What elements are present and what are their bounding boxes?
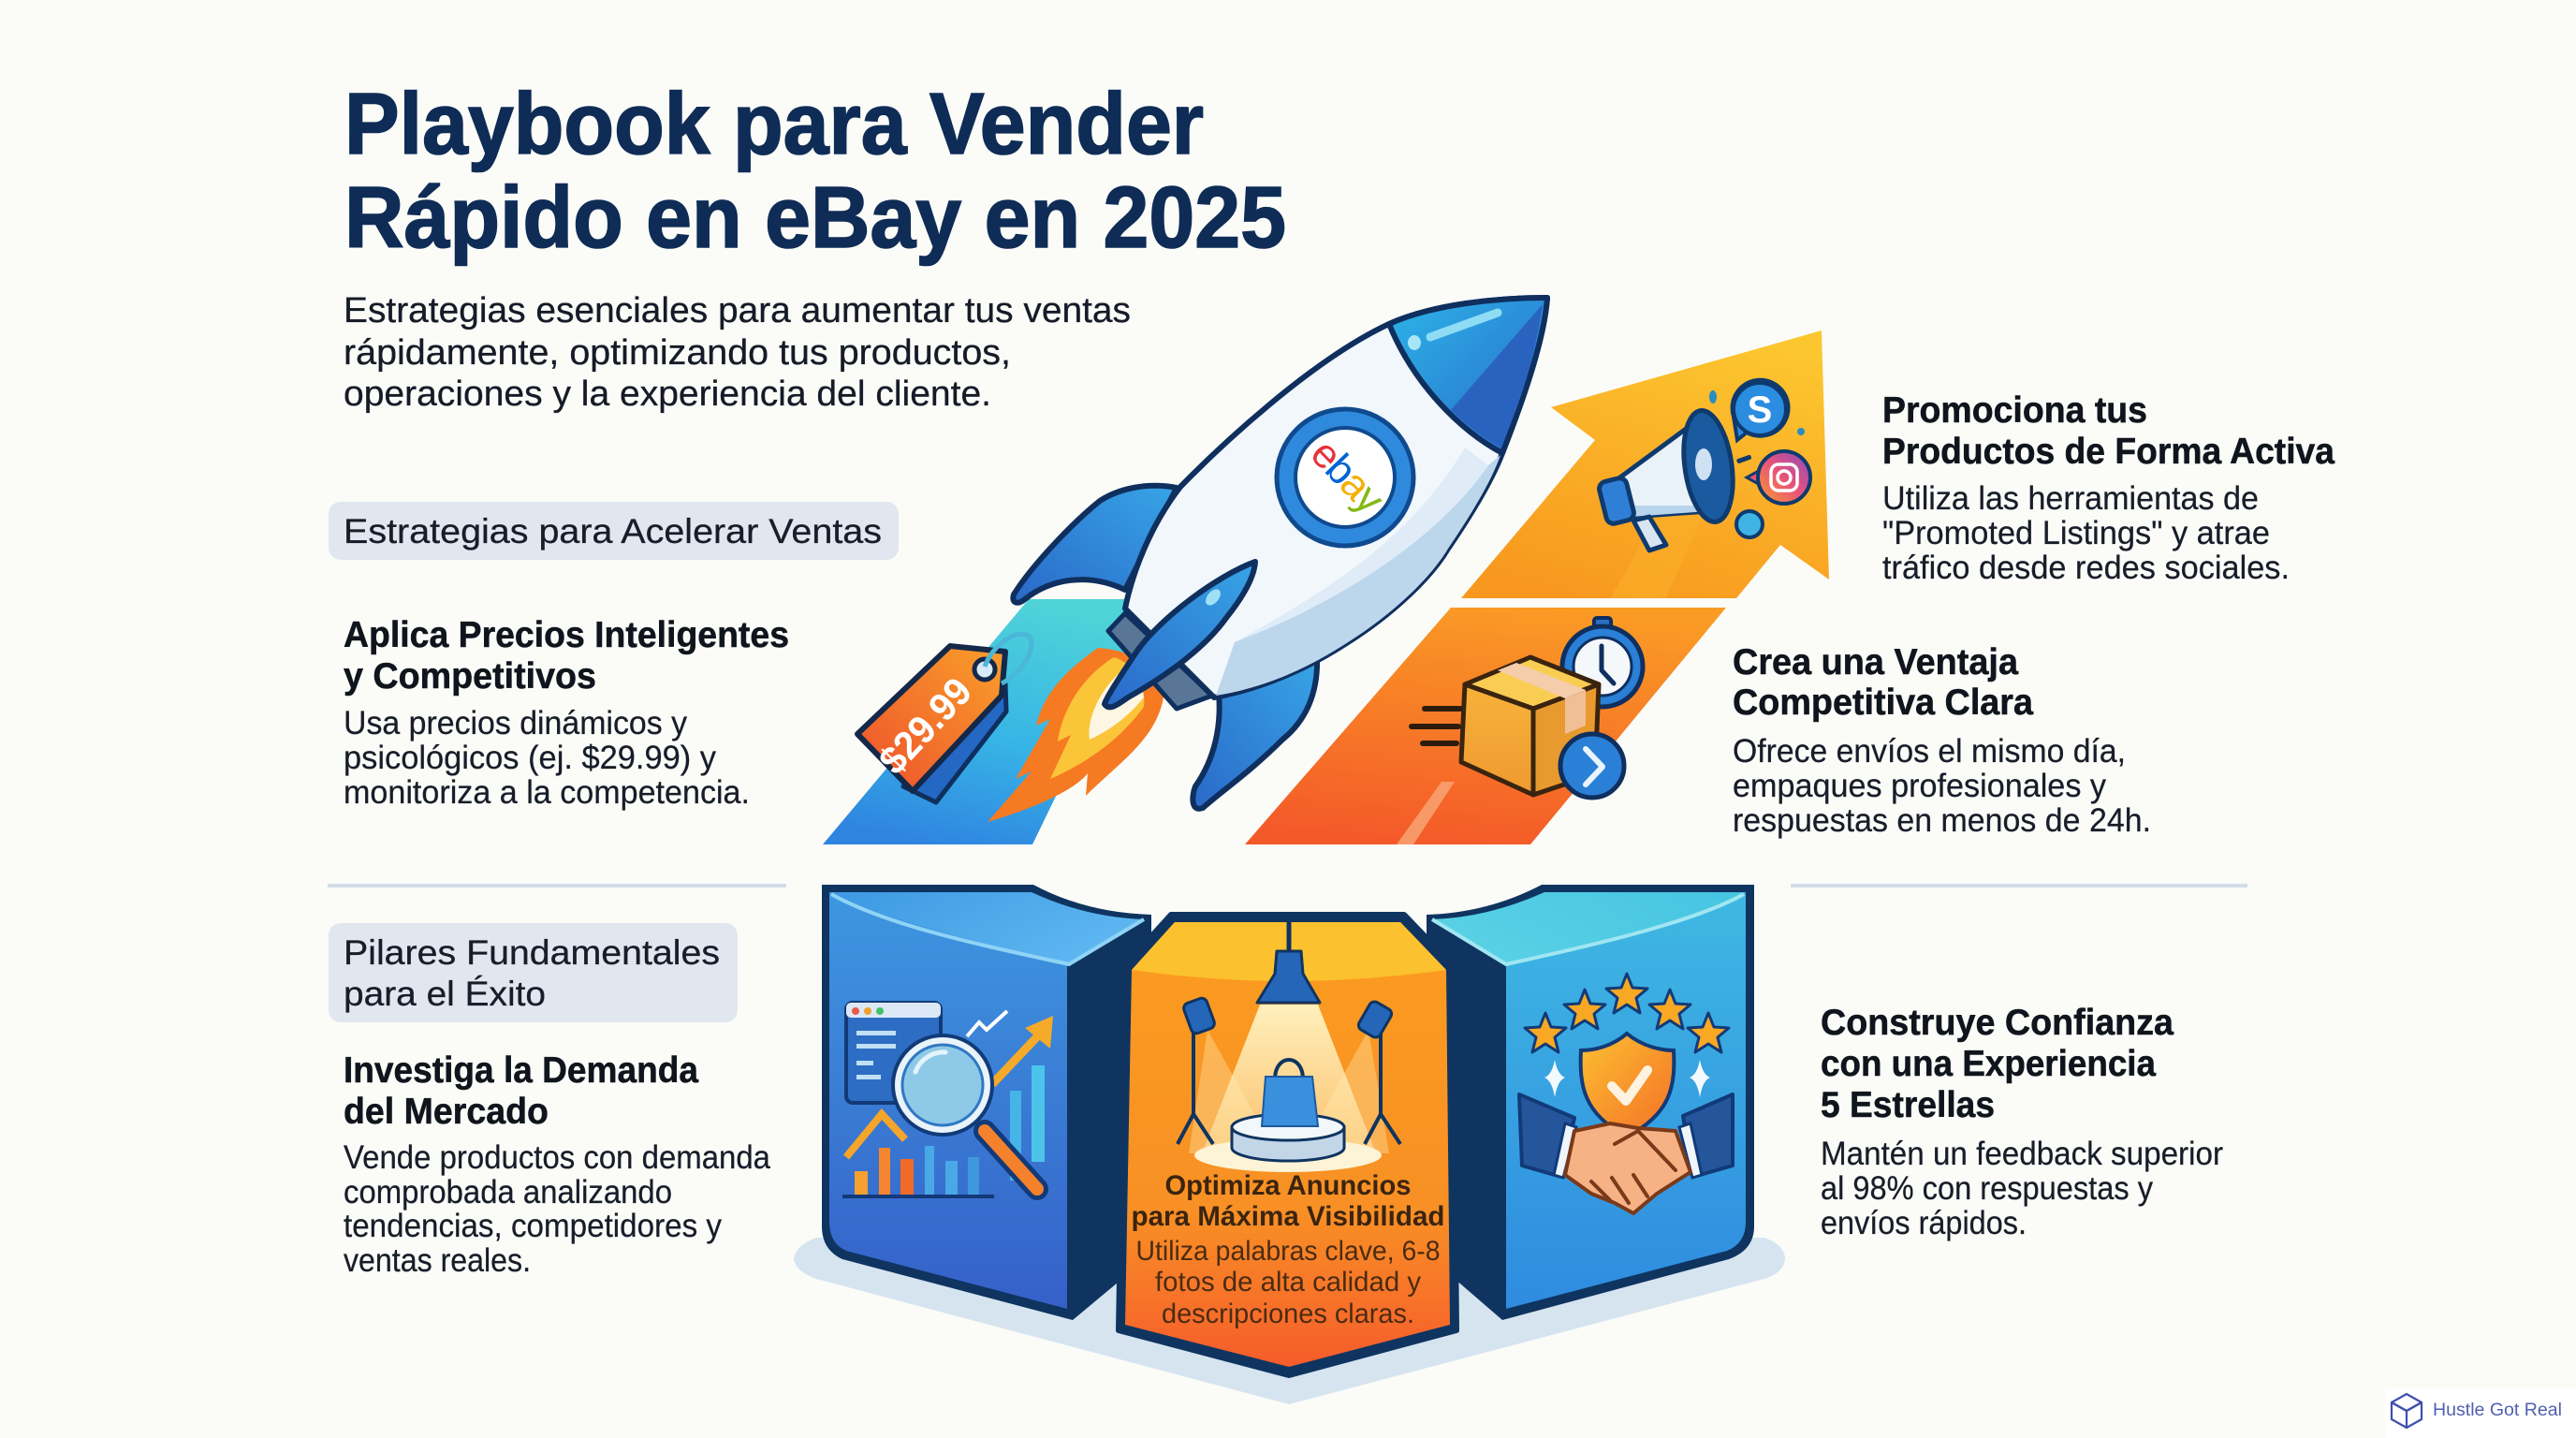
chart: trend line	[846, 1114, 905, 1157]
pillar text	[1131, 1170, 1445, 1329]
icon: display pedestal	[1232, 1114, 1344, 1161]
body: confianza: Mantén un feedback superior	[1821, 1136, 2223, 1172]
illustration: rocket launch	[823, 298, 1547, 844]
body: precios: psicológicos (ej. $29.99) y	[344, 740, 716, 776]
icon: small circle	[1736, 511, 1763, 537]
icon: hanging lamp	[1257, 922, 1320, 1003]
heading: precios: Aplica Precios Inteligentes	[344, 615, 789, 655]
watermark	[2385, 1388, 2576, 1438]
title	[344, 75, 1286, 266]
subtitle	[344, 291, 1131, 414]
rocket nozzle	[1108, 613, 1212, 709]
body: precios: Usa precios dinámicos y	[344, 705, 687, 741]
rocket body shading	[1216, 448, 1500, 696]
text block: demanda	[344, 1050, 771, 1279]
section label: pilares	[329, 923, 738, 1022]
icon: shopping bag	[1262, 1060, 1318, 1126]
body: promociona: tráfico desde redes sociales.	[1882, 550, 2290, 586]
illustration: orange up arrow with megaphone	[1461, 330, 1829, 598]
title: Playbook para Vender	[344, 75, 1204, 172]
icon: browser window	[846, 1003, 941, 1103]
chart: bars	[842, 1065, 1045, 1198]
rocket lower fin	[1193, 659, 1317, 809]
heading: demanda: Investiga la Demanda	[344, 1050, 698, 1091]
icon: five stars	[1525, 974, 1729, 1052]
body: ventaja: Ofrece envíos el mismo día,	[1733, 733, 2126, 770]
pedestal base	[794, 1238, 1785, 1404]
section label: estrategias: Estrategias para Acelerar Ventas	[344, 512, 882, 550]
pillar text: Optimiza Anuncios	[1164, 1170, 1412, 1201]
heading: demanda: del Mercado	[344, 1092, 549, 1132]
icon: instagram bubble	[1747, 451, 1810, 504]
porthole with eBay logo	[1277, 409, 1413, 546]
rocket upper fin	[1013, 486, 1177, 603]
icon: price tag	[857, 634, 1032, 802]
body: promociona: "Promoted Listings" y atrae	[1882, 515, 2270, 551]
text block: ventaja	[1733, 642, 2151, 839]
icon: megaphone	[1598, 407, 1739, 550]
body: promociona	[1882, 480, 2290, 586]
flame	[988, 648, 1164, 822]
rocket nose cone	[1389, 298, 1547, 453]
watermark: Hustle Got Real	[2433, 1401, 2562, 1420]
icon: shield	[1581, 1034, 1674, 1137]
body: demanda: comprobada analizando	[344, 1174, 672, 1211]
icon: spotlight right	[1356, 1000, 1400, 1144]
heading: precios: y Competitivos	[344, 656, 596, 697]
section label: pilares: Pilares Fundamentales	[344, 933, 720, 972]
body: precios	[344, 705, 750, 811]
body: promociona: Utiliza las herramientas de	[1882, 480, 2259, 517]
heading: demanda	[344, 1050, 698, 1132]
pillar text: para Máxima Visibilidad	[1131, 1201, 1445, 1232]
icon: speed lines	[1412, 709, 1460, 743]
heading: confianza	[1821, 1003, 2174, 1125]
icon: box	[1461, 657, 1599, 795]
pillar: trust and five stars	[1427, 885, 1754, 1320]
body: confianza	[1821, 1136, 2223, 1241]
text block: precios	[344, 615, 789, 811]
icon: spotlight left	[1178, 997, 1216, 1144]
light beams	[1189, 1005, 1389, 1172]
subtitle: rápidamente, optimizando tus productos,	[344, 333, 1011, 373]
porthole with eBay logo: ebay	[1302, 431, 1393, 522]
body: precios: monitoriza a la competencia.	[344, 774, 750, 811]
icon: up arrow	[967, 1011, 1053, 1084]
heading: ventaja: Competitiva Clara	[1733, 682, 2033, 723]
icon: stopwatch	[1562, 618, 1643, 707]
icon: handshake	[1519, 1094, 1733, 1213]
section label: estrategias	[329, 502, 899, 560]
rocket body	[1125, 298, 1547, 697]
icon: sound dots	[1709, 390, 1805, 464]
icon: cube logo	[2392, 1394, 2422, 1428]
section label: pilares: para el Éxito	[344, 975, 546, 1013]
text block: promociona	[1882, 390, 2334, 586]
body: ventaja: empaques profesionales y	[1733, 768, 2106, 804]
icon: chat bubble S: S	[1748, 389, 1772, 431]
rocket centre fin	[1105, 562, 1255, 707]
body: demanda: ventas reales.	[344, 1242, 531, 1279]
body: ventaja	[1733, 733, 2151, 839]
text block: confianza	[1821, 1003, 2223, 1241]
heading: precios	[344, 615, 789, 697]
illustration: orange parallelogram with delivery box	[1245, 608, 1726, 844]
pillar: optimize listings	[1119, 915, 1456, 1375]
body: ventaja: respuestas en menos de 24h.	[1733, 802, 2151, 839]
pillar text: descripciones claras.	[1162, 1299, 1414, 1329]
subtitle: Estrategias esenciales para aumentar tus ventas	[344, 291, 1131, 330]
heading: confianza: Construye Confianza	[1821, 1003, 2174, 1043]
icon: chat bubble S	[1733, 380, 1789, 440]
title: Rápido en eBay en 2025	[344, 169, 1286, 266]
pillar text: fotos de alta calidad y	[1155, 1267, 1421, 1298]
body: confianza: envíos rápidos.	[1821, 1205, 2027, 1241]
heading: ventaja: Crea una Ventaja	[1733, 642, 2018, 682]
pillar: market research	[822, 885, 1151, 1320]
heading: promociona: Promociona tus	[1882, 390, 2147, 431]
speed trail	[823, 599, 1151, 844]
heading: confianza: con una Experiencia	[1821, 1044, 2156, 1084]
heading: promociona: Productos de Forma Activa	[1882, 432, 2334, 472]
icon: arrow circle	[1560, 734, 1624, 798]
subtitle: operaciones y la experiencia del cliente.	[344, 374, 991, 414]
body: confianza: al 98% con respuestas y	[1821, 1170, 2153, 1207]
heading: promociona	[1882, 390, 2334, 472]
pillar text: Utiliza palabras clave, 6-8	[1136, 1236, 1440, 1267]
heading: ventaja	[1733, 642, 2033, 723]
icon: sparkles	[1544, 1060, 1710, 1097]
icon: price tag: $29.99	[871, 668, 980, 783]
body: demanda: tendencias, competidores y	[344, 1208, 722, 1244]
icon: magnifier	[893, 1035, 1037, 1189]
body: demanda: Vende productos con demanda	[344, 1139, 771, 1176]
body: demanda	[344, 1139, 771, 1279]
heading: confianza: 5 Estrellas	[1821, 1085, 1995, 1125]
